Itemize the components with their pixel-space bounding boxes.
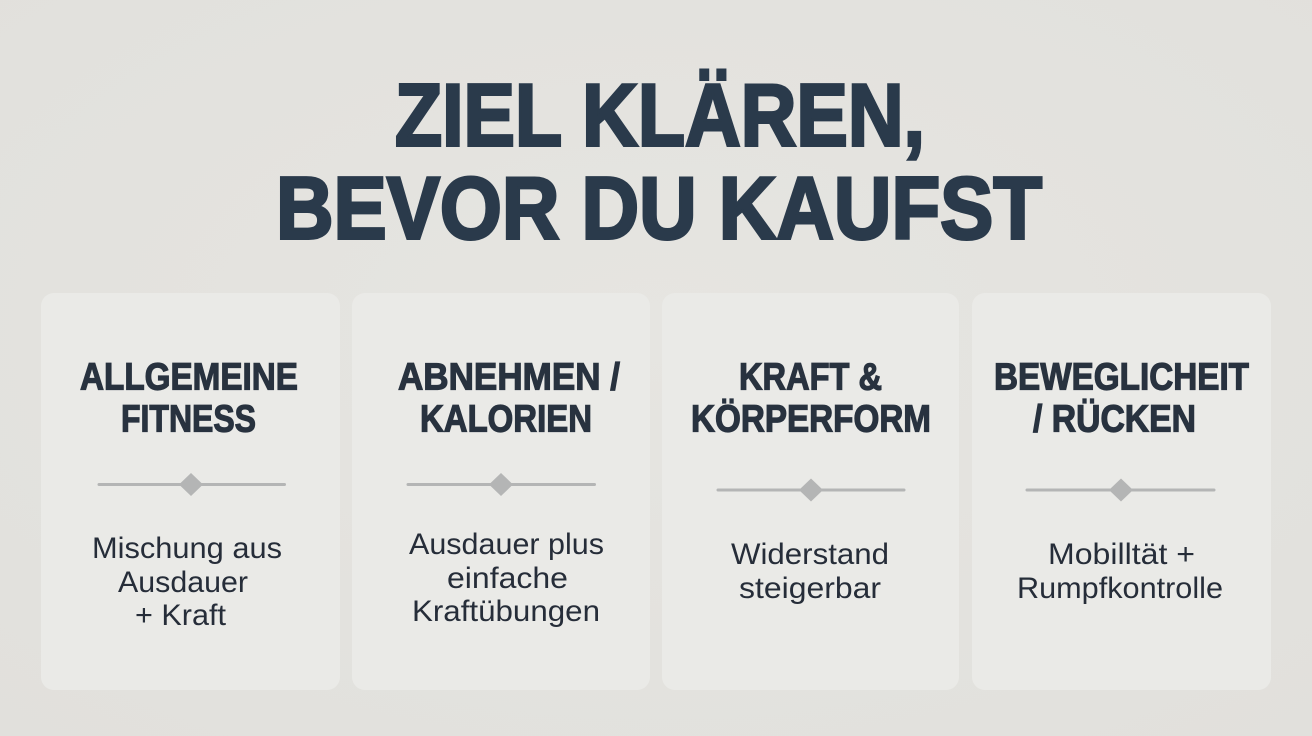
panel: Allgemeine Fitness bbox=[41, 293, 340, 690]
panel: Beweglichkeit / Rücken bbox=[972, 293, 1271, 690]
text: Mobilität + Rumpfkontrolle: Mobilltät + bbox=[1048, 538, 1195, 571]
title: BEVOR DU KAUFST bbox=[276, 158, 1042, 258]
heading: Kraft & Körperform: KÖRPERFORM bbox=[691, 398, 931, 440]
divider with diamond bbox=[1027, 478, 1214, 502]
heading: Beweglicheit / Rücken bbox=[994, 356, 1249, 440]
divider with diamond bbox=[408, 473, 594, 496]
divider with diamond bbox=[718, 478, 904, 502]
heading: Kraft & Körperform bbox=[691, 356, 931, 440]
text: Ausdauer plus einfache Kraftübungen: einfache bbox=[447, 562, 568, 595]
text: Mischung aus Ausdauer + Kraft: + Kraft bbox=[135, 599, 227, 632]
panel: Kraft & Körperform bbox=[662, 293, 959, 690]
heading: Kraft & Körperform: KRAFT & bbox=[739, 356, 882, 398]
heading: Allgemeine Fitness: FITNESS bbox=[121, 398, 256, 440]
heading: Abnehmen / Kalorien: KALORIEN bbox=[420, 398, 592, 440]
text: Ausdauer plus einfache Kraftübungen: Ausdauer plus bbox=[409, 528, 604, 561]
text: Mischung aus Ausdauer + Kraft bbox=[92, 532, 282, 632]
text: Mobilität + Rumpfkontrolle: Rumpfkontrolle bbox=[1017, 572, 1223, 605]
text: Ausdauer plus einfache Kraftübungen bbox=[409, 528, 604, 628]
text: Widerstand steigerbar: Widerstand bbox=[731, 538, 889, 571]
heading: Allgemeine Fitness: ALLGEMEINE bbox=[80, 356, 298, 398]
heading: Abnehmen / Kalorien bbox=[398, 356, 620, 440]
text: Mobilität + Rumpfkontrolle bbox=[1017, 538, 1223, 605]
text: Mischung aus Ausdauer + Kraft: Ausdauer bbox=[118, 566, 248, 599]
divider with diamond bbox=[99, 473, 284, 496]
panel: Abnehmen / Kalorien bbox=[352, 293, 650, 690]
text: Ausdauer plus einfache Kraftübungen: Kraftübungen bbox=[412, 595, 600, 628]
text: Mischung aus Ausdauer + Kraft: Mischung aus bbox=[92, 532, 282, 565]
title bbox=[276, 66, 1042, 258]
heading: Beweglicheit / Rücken: / RÜCKEN bbox=[1033, 398, 1196, 440]
heading: Abnehmen / Kalorien: ABNEHMEN / bbox=[398, 356, 620, 398]
text: Widerstand steigerbar bbox=[731, 538, 889, 605]
title: ZIEL KLÄREN, bbox=[395, 66, 925, 164]
heading: Allgemeine Fitness bbox=[80, 356, 298, 440]
text: Widerstand steigerbar: steigerbar bbox=[739, 572, 881, 605]
heading: Beweglicheit / Rücken: BEWEGLICHEIT bbox=[994, 356, 1249, 398]
